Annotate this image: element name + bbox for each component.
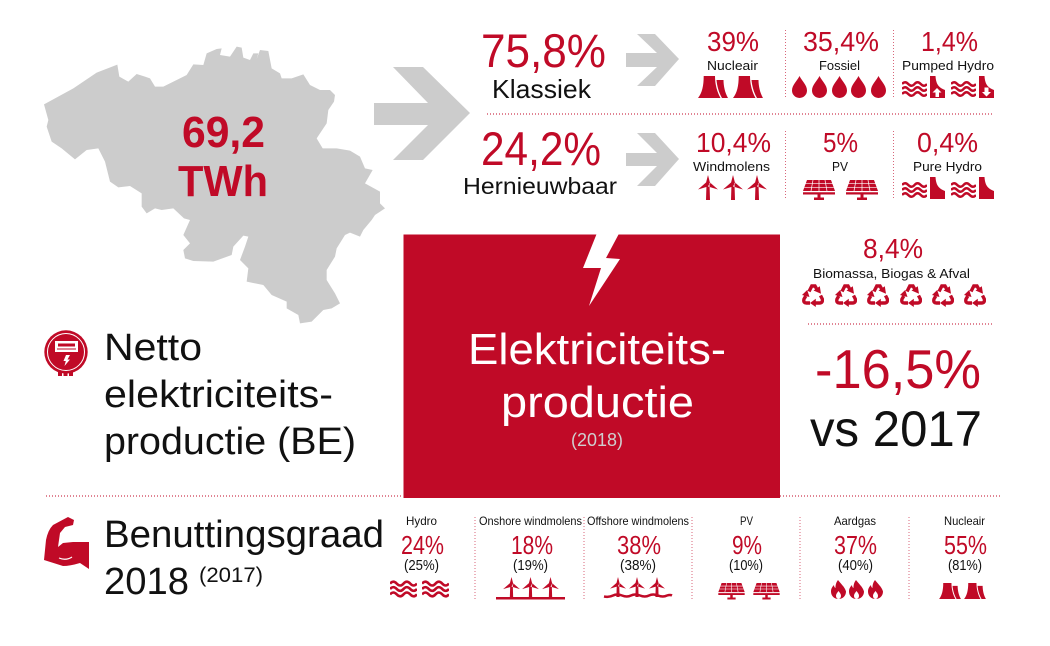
capacity: onshore windmolens: (19%) [513,557,548,574]
item: biomassa [802,233,984,307]
item: pv [803,127,878,200]
stat: hernieuwbaar: 24,2% [481,122,601,175]
item: fossiel: 35,4% [803,26,879,57]
capacity: pv [718,514,780,600]
capacity: aardgas: Aardgas [834,514,876,528]
icon: meter [44,330,88,376]
item: pumped hydro: Pumped Hydro [902,58,994,73]
change vs 2017: vs 2017 [810,401,982,457]
arrow: large [374,67,470,160]
capacity: aardgas [831,514,883,599]
item: pure hydro [902,127,994,199]
item: pv: PV [832,159,848,174]
heading: benuttingsgraad [104,514,384,603]
capacity: nucleair: 55% [944,530,987,560]
heading: netto elektriciteitsproductie: productie (BE) [104,421,356,463]
item: pv: 5% [823,127,858,158]
capacity: pv: PV [740,514,753,528]
stat: klassiek [481,24,606,104]
item: nucleair: Nucleair [707,58,759,73]
stat: hernieuwbaar: Hernieuwbaar [463,173,617,199]
total value: 69,2 [182,108,265,157]
map of Belgium [44,47,385,323]
capacity: aardgas: 37% [834,530,877,560]
item: nucleair [698,26,763,98]
capacity: onshore windmolens: Onshore windmolens [479,514,582,528]
item: biomassa: Biomassa, Biogas & Afval [813,266,970,281]
heading: netto elektriciteitsproductie: elektriciteits- [104,374,333,416]
capacity: hydro [390,514,449,596]
total value [178,108,268,206]
arrow: klassiek [626,34,679,86]
capacity: hydro: Hydro [406,514,437,528]
capacity: nucleair [939,514,987,599]
capacity: hydro: 24% [401,530,444,560]
heading: benuttingsgraad: (2017) [199,564,263,587]
capacity: onshore windmolens [479,514,582,600]
stat: hernieuwbaar [463,122,617,199]
capacity: offshore windmolens: 38% [617,530,661,560]
item: pumped hydro [902,26,994,98]
item: nucleair: 39% [707,26,759,57]
panel: elektriciteitsproductie: (2018) [571,430,623,450]
panel: elektriciteitsproductie [404,228,780,498]
item: biomassa: 8,4% [863,233,923,264]
arrow: hernieuwbaar [626,133,679,186]
item: fossiel [792,26,886,98]
stat: klassiek: 75,8% [481,24,606,77]
item: windmolens: Windmolens [693,159,771,174]
change vs 2017 [810,338,982,457]
capacity: pv: 9% [732,530,762,560]
capacity: nucleair: (81%) [948,557,982,574]
item: pure hydro: 0,4% [917,127,978,158]
capacity: hydro: (25%) [404,557,439,574]
item: pumped hydro: 1,4% [921,26,978,57]
capacity: offshore windmolens [587,514,689,597]
capacity: aardgas: (40%) [838,557,873,574]
item: windmolens: 10,4% [696,127,771,158]
panel: elektriciteitsproductie: productie [501,378,694,427]
capacity: offshore windmolens: (38%) [620,557,656,574]
capacity: nucleair: Nucleair [944,514,985,528]
stat: klassiek: Klassiek [492,74,592,104]
item: fossiel: Fossiel [819,58,860,73]
heading: benuttingsgraad: Benuttingsgraad [104,514,384,556]
heading: netto elektriciteitsproductie: Netto [104,327,202,369]
capacity: onshore windmolens: 18% [511,530,553,560]
heading: benuttingsgraad: 2018 [104,561,189,603]
capacity: pv: (10%) [729,557,763,574]
heading: netto elektriciteitsproductie [104,327,356,463]
total value: TWh [178,157,268,206]
item: windmolens [693,127,771,200]
icon: muscle [44,517,89,569]
change vs 2017: -16,5% [815,338,981,400]
item: pure hydro: Pure Hydro [913,159,982,174]
capacity: offshore windmolens: Offshore windmolens [587,514,689,528]
panel: elektriciteitsproductie: Elektriciteits- [468,325,726,374]
